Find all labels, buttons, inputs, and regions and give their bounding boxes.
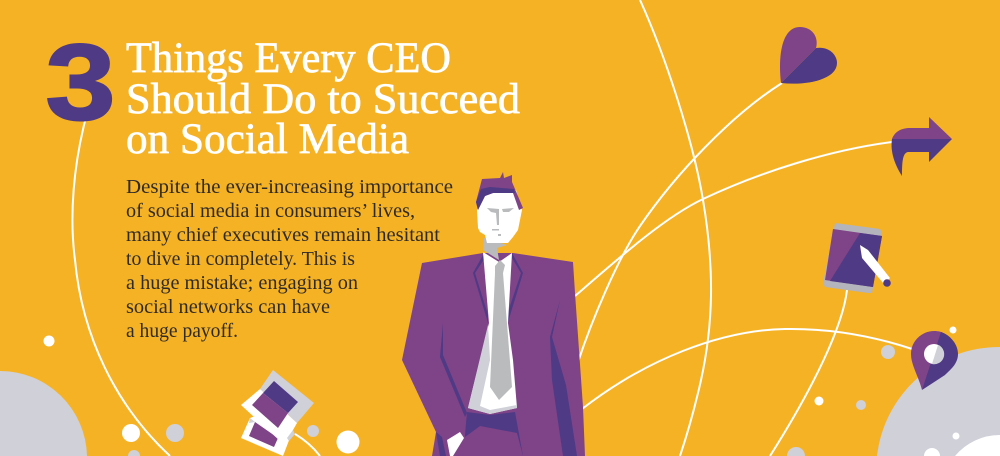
title: on Social Media xyxy=(126,116,409,163)
notebook cover: light xyxy=(825,229,882,287)
gray circle: bottom right xyxy=(877,347,1000,456)
facial features xyxy=(487,208,514,236)
face xyxy=(477,190,522,243)
front photo gray side xyxy=(260,370,314,423)
intro paragraph xyxy=(126,177,453,342)
icon: share arrow xyxy=(892,117,952,176)
shirt shadow xyxy=(468,325,517,414)
trouser front xyxy=(448,426,523,456)
notebook cover: dark xyxy=(830,233,882,287)
suit jacket xyxy=(402,253,585,456)
pen xyxy=(860,245,890,284)
tie xyxy=(490,260,512,400)
back photo gray edges xyxy=(249,418,295,441)
icon: notebook and pen xyxy=(823,223,891,293)
title xyxy=(126,35,520,163)
front photo image: dark xyxy=(263,381,298,413)
intro paragraph: of social media in consumers’ lives, xyxy=(126,201,415,222)
front photo white side xyxy=(241,389,297,441)
back photo xyxy=(241,410,297,456)
title: Things Every CEO xyxy=(126,35,451,82)
front photo image: light xyxy=(252,393,288,428)
intro paragraph: many chief executives remain hesitant xyxy=(126,225,441,246)
icon: photos xyxy=(241,370,314,456)
shirt xyxy=(468,252,517,414)
trouser waistband xyxy=(465,412,523,456)
intro paragraph: social networks can have xyxy=(126,297,330,318)
back photo image xyxy=(249,422,278,447)
hand xyxy=(447,432,464,456)
icon: map pin xyxy=(911,331,958,390)
icon: heart xyxy=(780,27,837,84)
white circle: bottom right corner xyxy=(955,435,1000,456)
decorative dots xyxy=(44,326,960,456)
intro paragraph: a huge mistake; engaging on xyxy=(126,273,358,294)
jacket shading xyxy=(436,253,577,456)
intro paragraph: to dive in completely. This is xyxy=(126,249,355,270)
intro paragraph: Despite the ever-increasing importance xyxy=(126,177,453,198)
hair xyxy=(476,172,523,210)
notebook binding xyxy=(823,223,882,293)
intro paragraph: a huge payoff. xyxy=(126,321,238,342)
title: Should Do to Succeed xyxy=(126,76,520,123)
gray circle: bottom left xyxy=(0,371,87,456)
hair shadow xyxy=(476,187,515,210)
businessman illustration xyxy=(402,172,585,456)
neck shadow xyxy=(483,238,507,260)
big number 3: 3 xyxy=(46,22,116,142)
pen cap xyxy=(883,279,891,287)
